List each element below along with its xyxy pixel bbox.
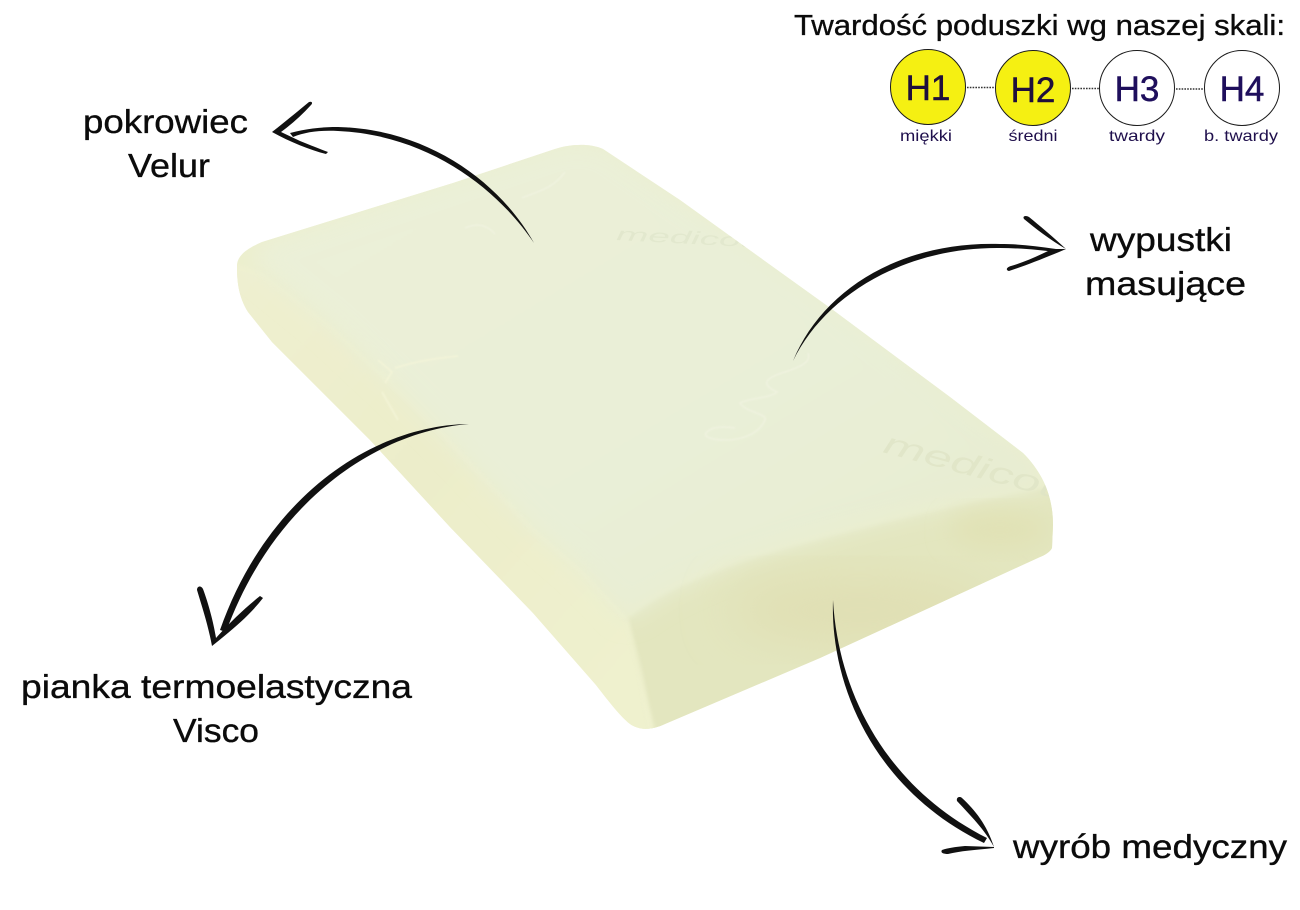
embossed seam marks: [378, 356, 458, 420]
label: wyrob medyczny: wyrób medyczny: [1012, 828, 1288, 865]
hardness scale: [794, 10, 1285, 145]
arrow head: [272, 102, 328, 154]
label: wypustki masujace: wypustki: [1089, 221, 1232, 258]
warm glow on right corner: [976, 521, 1012, 534]
scale labels: [900, 128, 1278, 145]
pale ridge highlight: [257, 270, 627, 620]
embossed text upper: medicot: [616, 224, 754, 251]
arrow: wyrob medyczny: [833, 600, 994, 854]
warm glow on front: [776, 588, 954, 640]
front face: [630, 490, 1053, 728]
pillow base shape: [237, 145, 1053, 729]
H3 circle: [1100, 50, 1174, 126]
label: pokrowiec Velur: [83, 103, 248, 184]
H1 circle: H1: [906, 69, 950, 108]
arrow: pokrowiec: [272, 102, 534, 243]
arrow head: [197, 586, 263, 646]
top face: [268, 149, 914, 613]
pillow shading surfaces: [228, 139, 1070, 740]
embossed text lower: medicot: [880, 427, 1060, 505]
scale labels: twardy: [1109, 128, 1165, 145]
seam at the front corner: [627, 620, 650, 726]
embossed logo wave: [706, 353, 809, 440]
H4 circle: [1204, 50, 1280, 126]
arrow: pianka: [197, 424, 469, 646]
H2 circle: [996, 50, 1070, 126]
H4 circle: H4: [1220, 70, 1264, 109]
label: pianka termoelastyczna Visco: pianka termoelastyczna: [21, 668, 413, 705]
left side face: [228, 262, 656, 740]
embossed logo wave, top: [465, 172, 565, 234]
label: pokrowiec Velur: pokrowiec: [83, 103, 248, 140]
label: pokrowiec Velur: Velur: [128, 147, 210, 184]
scale heading: Twardość poduszki wg naszej skali:: [794, 10, 1285, 42]
pillow: [228, 139, 1070, 740]
H2 circle: H2: [1011, 71, 1055, 110]
label: wypustki masujace: [1085, 221, 1246, 302]
arrow head: [1007, 216, 1066, 271]
label: pianka termoelastyczna Visco: Visco: [173, 712, 259, 749]
dotted connectors: [967, 88, 1204, 89]
arrow: wypustki: [793, 216, 1066, 361]
label: wypustki masujace: masujące: [1085, 265, 1246, 302]
arrow head: [941, 797, 994, 854]
scale labels: b. twardy: [1204, 128, 1278, 145]
H3 circle: H3: [1115, 70, 1159, 109]
scale labels: miękki: [900, 128, 952, 145]
scale labels: średni: [1008, 128, 1058, 145]
H1 circle: [890, 50, 966, 124]
label: pianka termoelastyczna Visco: [21, 668, 413, 749]
